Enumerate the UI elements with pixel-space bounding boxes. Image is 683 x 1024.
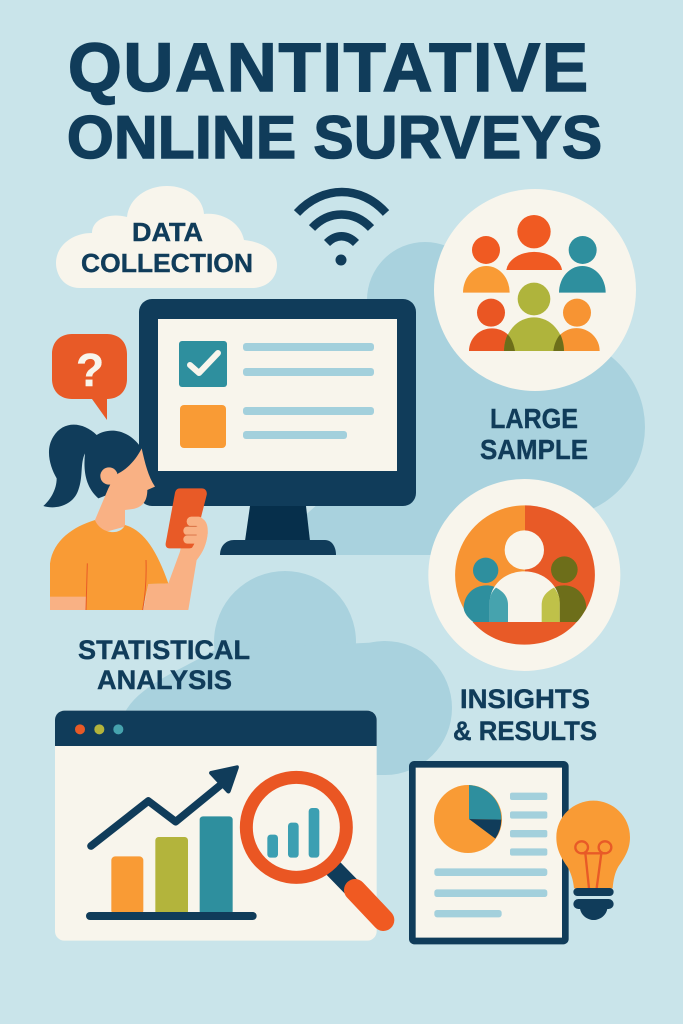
raised arm and hand <box>143 516 208 610</box>
window body <box>55 711 377 941</box>
monitor base <box>220 540 336 555</box>
statistical analysis label <box>78 635 250 695</box>
pie right half <box>525 505 595 622</box>
person right <box>542 556 586 622</box>
shirt seams <box>86 560 146 610</box>
magnifying glass <box>246 777 383 920</box>
empty checkbox <box>180 405 226 448</box>
insights label: INSIGHTS <box>460 684 590 714</box>
overlap shadows <box>504 334 564 351</box>
large sample label <box>480 403 588 465</box>
bar chart <box>86 816 257 920</box>
trend arrow <box>91 765 239 846</box>
insights label: & RESULTS <box>453 716 597 746</box>
window dots <box>75 724 123 734</box>
cloud: data collection <box>56 186 277 288</box>
neck and face <box>95 448 155 533</box>
ear <box>100 467 118 485</box>
panel: report document <box>412 764 565 941</box>
monitor screen <box>158 319 397 471</box>
monitor frame <box>139 299 416 506</box>
shirt <box>50 520 168 610</box>
monitor <box>139 299 416 555</box>
pie bottom segment <box>473 622 577 645</box>
large sample label: SAMPLE <box>480 434 588 465</box>
question speech bubble <box>52 334 127 420</box>
background cloud: lower middle <box>125 571 452 775</box>
person lower left <box>469 299 515 351</box>
person upper left <box>463 236 510 293</box>
icon: wifi <box>297 192 386 266</box>
person center <box>490 530 560 622</box>
title: ONLINE SURVEYS <box>67 104 602 171</box>
document page <box>412 764 565 941</box>
fingers <box>183 517 208 560</box>
sleeve cuff <box>50 597 86 610</box>
phone <box>166 488 207 548</box>
panel: insights circle <box>428 479 620 671</box>
statistical analysis label: ANALYSIS <box>97 665 232 695</box>
title <box>67 29 602 171</box>
title: QUANTITATIVE <box>68 29 588 106</box>
panel: large sample circle <box>434 189 636 391</box>
checked checkbox <box>179 341 227 387</box>
statistical analysis label: STATISTICAL <box>78 635 250 665</box>
monitor stand <box>245 506 310 541</box>
large sample label: LARGE <box>490 403 578 434</box>
text lines <box>434 793 547 917</box>
answer lines <box>243 343 374 439</box>
person upper right <box>559 236 606 293</box>
question speech bubble: ? <box>76 344 104 396</box>
ponytail and hair <box>43 425 143 507</box>
person front center <box>504 283 564 351</box>
person left <box>464 558 508 622</box>
person lower right <box>553 299 600 351</box>
pie chart <box>434 785 502 853</box>
cloud: data collection: COLLECTION <box>81 248 253 278</box>
icon: light bulb <box>556 801 630 920</box>
woman with phone <box>43 425 208 610</box>
panel: analysis browser window <box>55 711 383 941</box>
pie left half <box>455 505 525 622</box>
person top center <box>506 215 562 270</box>
title bar <box>55 711 377 746</box>
background cloud: upper right <box>300 242 645 555</box>
finger separators <box>184 526 197 535</box>
cloud: data collection: DATA <box>132 217 203 247</box>
insights label <box>453 684 597 746</box>
